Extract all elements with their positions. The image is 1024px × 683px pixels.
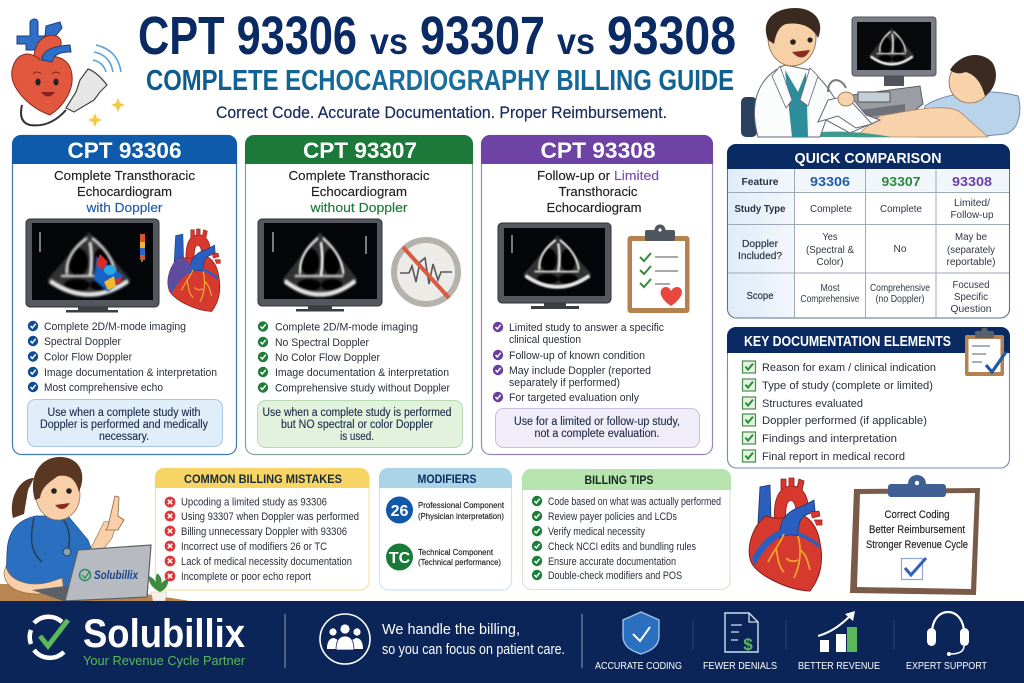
panel header: CPT 93308: CPT 93308	[540, 138, 656, 163]
list: features: Complete 2D/M-mode imaging	[275, 322, 418, 334]
table row: scope: Comprehensive	[800, 294, 860, 305]
table row: scope: Question	[950, 304, 992, 315]
heading: description	[54, 168, 196, 215]
table row: study type	[734, 198, 994, 221]
table header: quick comparison: QUICK COMPARISON	[794, 150, 942, 167]
list: features: For targeted evaluation only	[509, 392, 639, 404]
footer band	[0, 601, 1024, 683]
table row: Doppler included: Doppler	[742, 239, 779, 250]
icon: echo monitor	[498, 223, 611, 309]
table row: study type: Complete	[880, 204, 922, 215]
footer logo: Solubillix: Solubillix	[83, 612, 245, 656]
icon: fewer denials document	[703, 613, 777, 672]
callout: when to use 93308	[496, 408, 700, 448]
panel: CPT 93308	[481, 135, 713, 454]
panel: CPT 93307	[245, 135, 473, 454]
table row: study type: Follow-up	[950, 210, 994, 221]
modifier TC: (Technical performance)	[418, 558, 501, 567]
list: features: Comprehensive study without Doppler	[275, 382, 450, 394]
table row: codes: Feature	[742, 177, 779, 188]
title: CPT 93306	[138, 6, 357, 66]
list: tips: Verify medical necessity	[548, 526, 645, 538]
list: features	[258, 321, 450, 394]
list: features: Follow-up of known condition	[509, 350, 645, 362]
icon: echo monitor	[258, 219, 382, 312]
icon: anatomical heart	[168, 229, 220, 311]
icon: clipboard with tick	[965, 328, 1006, 376]
heading: description: Echocardiogram	[546, 200, 642, 215]
table row: scope: Scope	[746, 291, 774, 302]
table row: Doppler included: (separately	[947, 245, 995, 256]
callout: correct coding clipboard: Better Reimbursement	[869, 524, 965, 536]
table row: Doppler included: reportable)	[946, 257, 996, 268]
table row: codes	[742, 175, 992, 189]
table row: scope	[746, 280, 992, 315]
title: vs	[370, 21, 408, 62]
callout: when to use 93307	[258, 400, 462, 448]
list: tips: Review payer policies and LCDs	[548, 511, 677, 523]
list: documentation items: Doppler performed (if applicable)	[762, 415, 927, 427]
heading: description: Limited	[614, 168, 659, 183]
table row: Doppler included: Included?	[738, 251, 782, 262]
table row: scope: Most	[820, 283, 840, 294]
callout: when to use 93306: Doppler is performed and medically	[40, 419, 208, 431]
table row: scope: Comprehensive	[870, 283, 930, 294]
panel header: CPT 93306: CPT 93306	[68, 138, 182, 163]
callout: when to use 93306: necessary.	[99, 431, 149, 443]
list: features: Complete 2D/M-mode imaging	[44, 321, 186, 333]
list: mistakes	[165, 496, 359, 583]
icon: accurate coding shield	[595, 612, 682, 672]
illustration: doctor performing echo on patient	[741, 8, 1020, 137]
table row: scope: Focused	[952, 280, 990, 291]
panel: modifiers	[379, 468, 512, 590]
list: tips: Double-check modifiers and POS	[548, 570, 682, 582]
panel header: key documentation	[727, 327, 1010, 353]
icon: better revenue chart: BETTER REVENUE	[798, 660, 880, 672]
heading: description: with Doppler	[85, 200, 163, 215]
callout: when to use 93306	[28, 400, 222, 446]
list: features: Color Flow Doppler	[44, 352, 132, 364]
list: documentation items: Type of study (complete or limited)	[762, 380, 933, 392]
panel header: billing tips: BILLING TIPS	[584, 473, 654, 487]
title: 93307	[420, 6, 545, 66]
table row: scope: (no Doppler)	[876, 294, 924, 305]
title: 93308	[607, 6, 736, 66]
list: mistakes: Using 93307 when Doppler was performed	[181, 511, 359, 523]
table row: Doppler included	[738, 232, 996, 268]
callout: when to use 93307: but NO spectral or color Doppler	[281, 419, 433, 431]
footer logo: Solubillix: Your Revenue Cycle Partner	[83, 653, 246, 668]
list: features	[28, 321, 217, 394]
icon: accurate coding shield: ACCURATE CODING	[595, 660, 682, 672]
table row: study type: Complete	[810, 204, 852, 215]
modifier 26	[386, 496, 505, 524]
panel header: CPT 93306	[12, 135, 237, 164]
modifier TC	[386, 544, 501, 570]
list: features: Image documentation & interpretation	[44, 367, 217, 379]
callout: when to use 93308: not a complete evaluation.	[534, 428, 660, 440]
list: features: separately if performed)	[509, 377, 620, 389]
panel header: CPT 93307	[245, 135, 473, 164]
callout: when to use 93306: Use when a complete study with	[48, 407, 200, 419]
modifier 26: 26	[391, 503, 408, 520]
modifier 26: (Physician interpretation)	[418, 512, 504, 521]
list: features: No Spectral Doppler	[275, 337, 369, 349]
list: documentation items: Reason for exam / clinical indication	[762, 362, 936, 374]
icon: better revenue chart	[798, 611, 880, 672]
list: features: Image documentation & interpretation	[275, 367, 449, 379]
table row: Doppler included: (Spectral &	[806, 245, 854, 256]
table row: codes: 93308	[952, 175, 992, 189]
footer message text	[382, 621, 565, 658]
title: vs	[557, 21, 595, 62]
list: documentation items: Findings and interpretation	[762, 433, 897, 445]
list: features	[493, 322, 664, 404]
list: documentation items: Structures evaluated	[762, 398, 863, 410]
panel header: billing mistakes: COMMON BILLING MISTAKES	[184, 472, 342, 486]
heading: description: Transthoracic	[558, 184, 638, 199]
list: tips	[532, 496, 721, 582]
icon: echo monitor with colour Doppler	[26, 219, 159, 312]
modifier TC: TC	[389, 550, 411, 567]
panel: quick comparison table	[727, 144, 1010, 318]
callout: when to use 93307: Use when a complete study is performed	[262, 407, 452, 419]
heading: description: Complete Transthoracic	[54, 168, 196, 183]
table row: Doppler included: Yes	[822, 232, 838, 243]
heading: description: Follow-up or	[537, 168, 611, 183]
table row: study type: Study Type	[734, 204, 786, 215]
list: mistakes: Billing unnecessary Doppler with 93306	[181, 526, 347, 538]
callout: when to use 93308: Use for a limited or follow-up study,	[514, 416, 680, 428]
list: documentation items: Final report in medical record	[762, 451, 905, 463]
list: features: clinical question	[509, 334, 581, 346]
footer message: people icon	[320, 614, 370, 664]
list: features: Most comprehensive echo	[44, 382, 163, 394]
panel header: CPT 93308	[481, 135, 713, 164]
icon: large anatomical heart	[749, 478, 822, 591]
icon: expert support headset	[906, 612, 987, 672]
icon: clipboard with checks and heart	[628, 224, 690, 313]
footer message text: so you can focus on patient care.	[382, 641, 565, 658]
callout: when to use 93307: is used.	[340, 431, 374, 443]
list: tips: Ensure accurate documentation	[548, 556, 676, 568]
panel: billing tips	[522, 469, 731, 590]
callout: correct coding clipboard: Stronger Revenue Cycle	[866, 539, 968, 551]
modifier 26: Professional Component	[418, 501, 505, 510]
footer message text: We handle the billing,	[382, 621, 520, 638]
illustration: nurse with laptop: Solubillix	[94, 568, 139, 582]
list: features: Spectral Doppler	[44, 336, 121, 348]
table row: study type: Limited/	[954, 198, 990, 209]
icon: fewer denials document: FEWER DENIALS	[703, 660, 777, 672]
illustration: nurse with laptop	[0, 457, 190, 602]
icon: expert support headset: EXPERT SUPPORT	[906, 660, 987, 672]
table row: codes: 93306	[810, 175, 850, 189]
list: tips: Code based on what was actually performed	[548, 496, 721, 508]
list: features: May include Doppler (reported	[509, 365, 651, 377]
list: features: No Color Flow Doppler	[275, 352, 380, 364]
list: features: Limited study to answer a specific	[509, 322, 664, 334]
heading: description: Echocardiogram	[77, 184, 172, 199]
panel header: key documentation: KEY DOCUMENTATION ELEMENTS	[744, 334, 951, 350]
heading: description	[288, 168, 430, 215]
panel header: CPT 93307: CPT 93307	[303, 138, 417, 163]
subtitle: COMPLETE ECHOCARDIOGRAPHY BILLING GUIDE	[146, 65, 734, 97]
icon: fewer denials document: $	[743, 635, 753, 654]
list: tips: Check NCCI edits and bundling rules	[548, 541, 696, 553]
table row: Doppler included: Color)	[816, 257, 844, 268]
modifier TC: Technical Component	[418, 548, 494, 557]
list: mistakes: Lack of medical necessity documentation	[181, 556, 352, 568]
table row: Doppler included: No	[894, 244, 907, 255]
callout: correct coding clipboard	[850, 475, 980, 595]
title	[138, 6, 736, 66]
icon: desk plant	[149, 574, 168, 601]
panel header: modifiers: MODIFIERS	[418, 472, 476, 486]
icon: no Doppler symbol	[394, 240, 458, 304]
table row: scope: Specific	[954, 292, 988, 303]
list: documentation items	[742, 361, 936, 463]
panel: common billing mistakes	[155, 468, 369, 590]
callout: correct coding clipboard: Correct Coding	[884, 509, 950, 521]
list: mistakes: Incomplete or poor echo report	[181, 571, 311, 583]
tagline: Correct Code. Accurate Documentation. Proper Reimbursement.	[216, 104, 667, 122]
icon: heart mascot with ultrasound probe	[12, 19, 125, 127]
heading: description: Complete Transthoracic	[288, 168, 430, 183]
table row: codes: 93307	[882, 175, 921, 189]
panel: key documentation elements	[727, 327, 1010, 468]
heading: description: Echocardiogram	[311, 184, 407, 199]
panel header: billing mistakes	[155, 468, 369, 488]
heading: description	[537, 168, 659, 215]
list: mistakes: Incorrect use of modifiers 26 or TC	[181, 541, 327, 553]
panel header: billing tips	[522, 469, 731, 490]
heading: description: without Doppler	[309, 200, 408, 215]
table header: quick comparison	[727, 144, 1010, 169]
first column shading	[728, 169, 794, 318]
panel: CPT 93306	[12, 135, 237, 454]
table row: Doppler included: May be	[955, 232, 987, 243]
footer logo: Solubillix	[30, 612, 246, 668]
list: mistakes: Upcoding a limited study as 93306	[181, 496, 327, 508]
